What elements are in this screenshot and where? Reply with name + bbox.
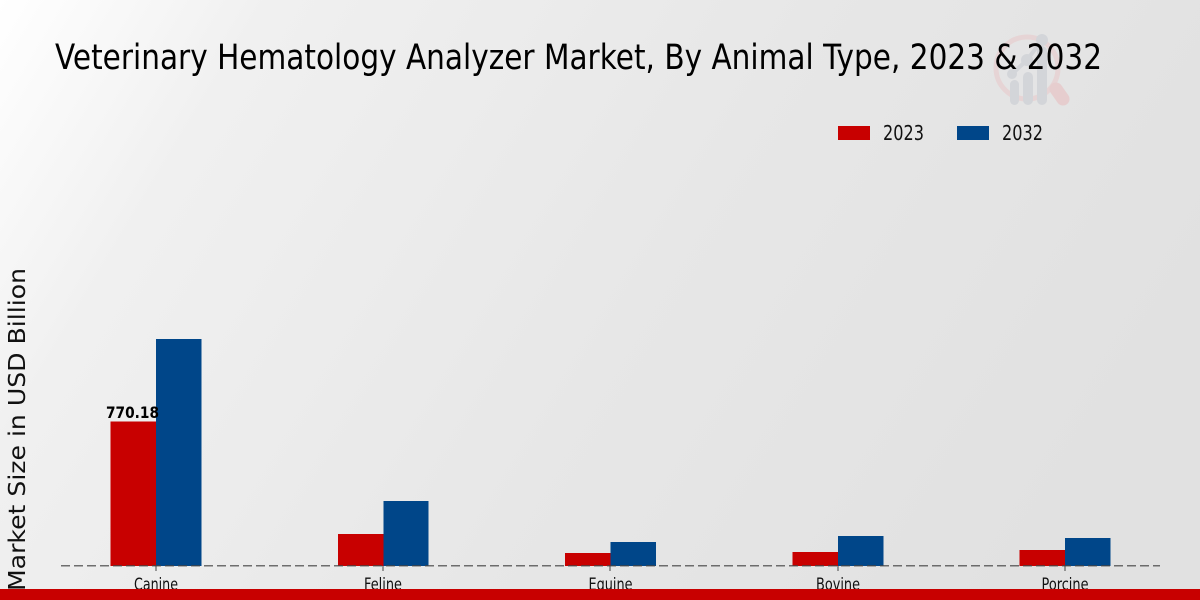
group: Equine — [565, 542, 656, 566]
x axis labels: Porcine — [1042, 575, 1088, 595]
x axis labels: Bovine — [816, 575, 860, 595]
bar chart — [106, 339, 1110, 566]
icon: watermark logo — [996, 34, 1063, 105]
x axis baseline — [61, 565, 1160, 567]
value label: 770.18: 770.18 — [106, 403, 159, 422]
x axis labels: Equine — [588, 575, 632, 595]
legend — [838, 121, 1043, 145]
group: Porcine — [1020, 538, 1110, 566]
legend item: 2023: 2023 — [883, 121, 924, 145]
legend item: 2032 — [957, 121, 1043, 145]
x axis labels: Canine — [134, 575, 178, 595]
group: Bovine — [792, 536, 884, 566]
legend item: 2032: 2032 — [1002, 121, 1043, 145]
y axis label: Market Size in USD Billion — [5, 268, 31, 591]
x axis labels: Feline — [364, 575, 402, 595]
legend item: 2023 — [838, 121, 924, 145]
bottom red band — [0, 589, 1200, 600]
group: Feline — [338, 501, 428, 566]
x axis labels — [134, 566, 1088, 595]
group: Canine — [106, 339, 202, 566]
